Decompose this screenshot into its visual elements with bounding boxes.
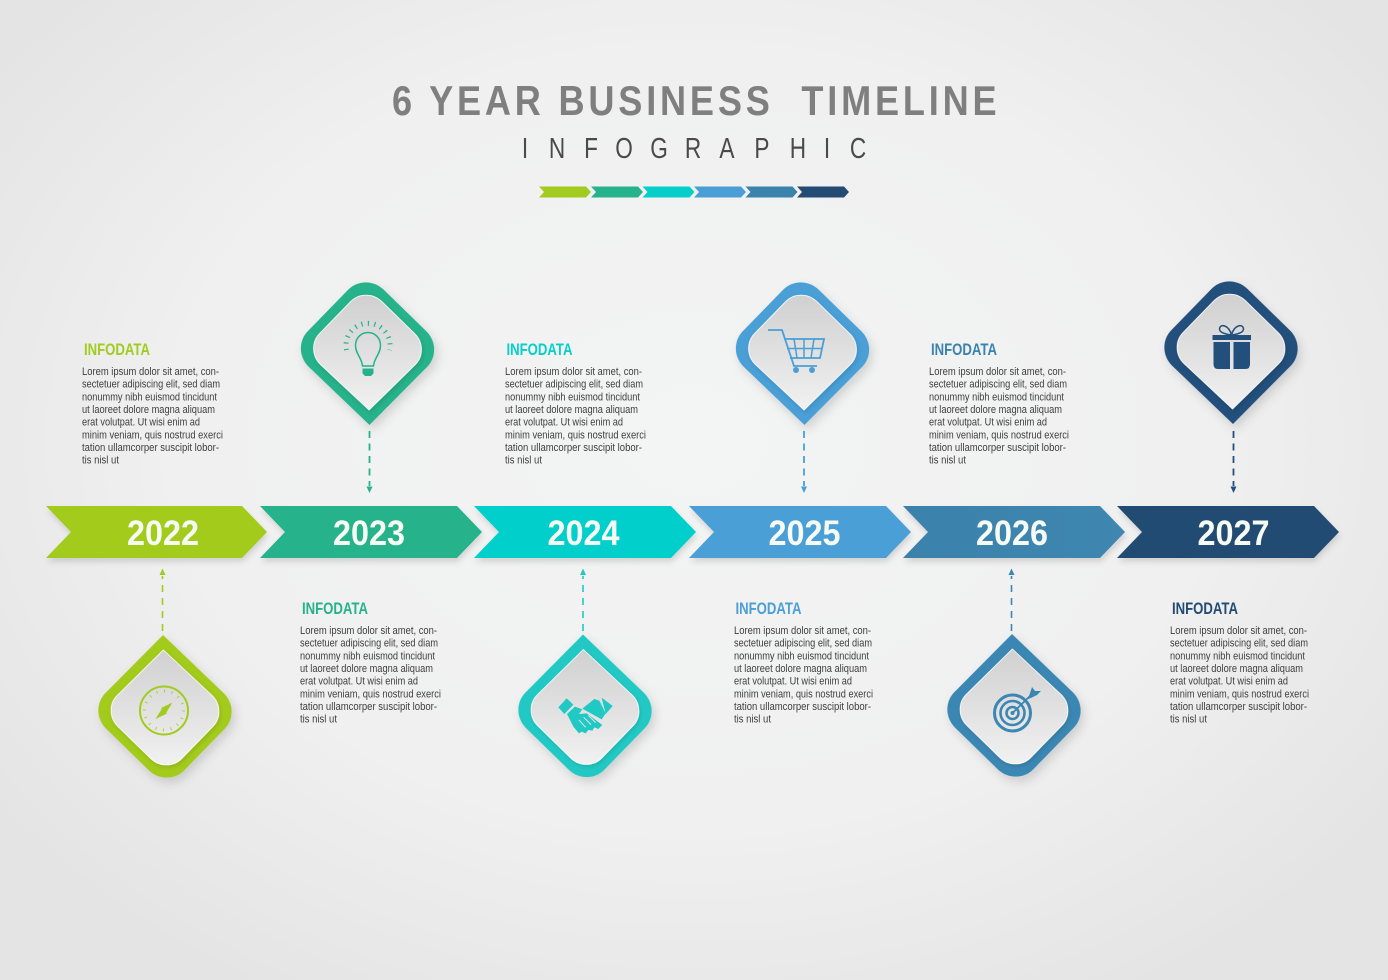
body 2026: sectetuer adipiscing elit, sed diam <box>929 379 1067 391</box>
milestone 2023 <box>299 282 436 493</box>
body 2026: tation ullamcorper suscipit lobor- <box>929 442 1066 454</box>
body 2025: nonummy nibh euismod tincidunt <box>734 650 869 662</box>
dashed arrow 2022 <box>160 568 166 631</box>
body 2023: nonummy nibh euismod tincidunt <box>300 650 435 662</box>
icon: handshake <box>558 698 613 733</box>
body 2027: sectetuer adipiscing elit, sed diam <box>1170 638 1308 650</box>
badge 2025 <box>734 282 871 425</box>
body 2027 <box>1170 625 1309 726</box>
heading 2026: INFODATA <box>931 340 997 359</box>
body 2026: tis nisl ut <box>929 455 966 467</box>
body 2025 <box>734 625 873 726</box>
badge 2023 <box>299 282 436 425</box>
badge 2024 <box>516 634 653 777</box>
body 2023: ut laoreet dolore magna aliquam <box>300 663 433 675</box>
body 2025: erat volutpat. Ut wisi enim ad <box>734 676 852 688</box>
heading 2025: INFODATA <box>736 599 802 618</box>
title: 6 YEAR BUSINESS TIMELINE <box>392 79 997 125</box>
text block 2027 <box>1170 599 1309 726</box>
icon: shopping cart <box>768 330 824 373</box>
body 2024: minim veniam, quis nostrud exerci <box>505 429 646 441</box>
timeline ribbon <box>46 506 1339 558</box>
icon: compass <box>140 686 188 734</box>
ribbon 2027: 2027 <box>1198 514 1270 553</box>
body 2027: erat volutpat. Ut wisi enim ad <box>1170 676 1288 688</box>
body 2027: tis nisl ut <box>1170 714 1207 726</box>
ribbon 2024: 2024 <box>548 514 620 553</box>
milestone 2022 <box>96 568 233 778</box>
body 2022: erat volutpat. Ut wisi enim ad <box>82 417 200 429</box>
body 2023: Lorem ipsum dolor sit amet, con- <box>300 625 437 637</box>
body 2024: sectetuer adipiscing elit, sed diam <box>505 379 643 391</box>
dashed arrow 2026 <box>1008 568 1014 631</box>
body 2025: sectetuer adipiscing elit, sed diam <box>734 638 872 650</box>
body 2025: ut laoreet dolore magna aliquam <box>734 663 867 675</box>
ribbon 2024 <box>474 506 696 558</box>
body 2022 <box>82 366 223 467</box>
body 2027: nonummy nibh euismod tincidunt <box>1170 650 1305 662</box>
body 2026: Lorem ipsum dolor sit amet, con- <box>929 366 1066 378</box>
ribbon 2026: 2026 <box>976 514 1048 553</box>
badge 2026 <box>945 634 1082 777</box>
body 2026: ut laoreet dolore magna aliquam <box>929 404 1062 416</box>
body 2022: tis nisl ut <box>82 455 119 467</box>
body 2024: nonummy nibh euismod tincidunt <box>505 391 640 403</box>
badge 2027 <box>1163 281 1300 424</box>
body 2026: erat volutpat. Ut wisi enim ad <box>929 417 1047 429</box>
body 2023: sectetuer adipiscing elit, sed diam <box>300 638 438 650</box>
ribbon 2027 <box>1117 506 1339 558</box>
body 2023: minim veniam, quis nostrud exerci <box>300 688 441 700</box>
body 2026: minim veniam, quis nostrud exerci <box>929 429 1069 441</box>
badge 2022 <box>96 635 233 778</box>
body 2022: Lorem ipsum dolor sit amet, con- <box>82 366 219 378</box>
body 2027: ut laoreet dolore magna aliquam <box>1170 663 1303 675</box>
text block 2026 <box>929 340 1069 467</box>
ribbon 2022: 2022 <box>127 514 199 553</box>
body 2022: minim veniam, quis nostrud exerci <box>82 429 223 441</box>
body 2024: tis nisl ut <box>505 455 542 467</box>
heading 2023: INFODATA <box>302 599 368 618</box>
body 2024: Lorem ipsum dolor sit amet, con- <box>505 366 642 378</box>
body 2025: tis nisl ut <box>734 714 771 726</box>
body 2025: tation ullamcorper suscipit lobor- <box>734 701 871 713</box>
body 2026: nonummy nibh euismod tincidunt <box>929 391 1064 403</box>
subtitle: INFOGRAPHIC <box>522 131 866 165</box>
icon: target <box>994 687 1041 731</box>
body 2027: tation ullamcorper suscipit lobor- <box>1170 701 1307 713</box>
body 2024: erat volutpat. Ut wisi enim ad <box>505 417 623 429</box>
ribbon 2026 <box>903 506 1125 558</box>
ribbon 2025 <box>689 506 911 558</box>
body 2024: tation ullamcorper suscipit lobor- <box>505 442 642 454</box>
text block 2024 <box>505 340 646 467</box>
milestone 2025 <box>734 282 871 493</box>
heading 2027: INFODATA <box>1172 599 1238 618</box>
body 2023 <box>300 625 441 726</box>
text block 2025 <box>734 599 873 726</box>
body 2022: ut laoreet dolore magna aliquam <box>82 404 215 416</box>
body 2026 <box>929 366 1069 467</box>
body 2027: Lorem ipsum dolor sit amet, con- <box>1170 625 1307 637</box>
body 2025: Lorem ipsum dolor sit amet, con- <box>734 625 871 637</box>
body 2023: tis nisl ut <box>300 714 337 726</box>
dashed arrow 2025 <box>801 431 807 493</box>
body 2027: minim veniam, quis nostrud exerci <box>1170 688 1309 700</box>
text block 2023 <box>300 599 441 726</box>
icon: gift box <box>1212 326 1251 369</box>
text block 2022 <box>82 340 223 467</box>
milestone 2024 <box>516 568 653 777</box>
body 2024 <box>505 366 646 467</box>
body 2023: tation ullamcorper suscipit lobor- <box>300 701 437 713</box>
title chevron strip <box>539 186 849 198</box>
dashed arrow 2024 <box>580 568 586 631</box>
milestone 2026 <box>945 568 1082 777</box>
ribbon 2023: 2023 <box>333 514 405 553</box>
body 2023: erat volutpat. Ut wisi enim ad <box>300 676 418 688</box>
milestone 2027 <box>1163 281 1300 493</box>
body 2022: nonummy nibh euismod tincidunt <box>82 391 217 403</box>
body 2022: sectetuer adipiscing elit, sed diam <box>82 379 220 391</box>
dashed arrow 2023 <box>366 431 372 493</box>
heading 2024: INFODATA <box>506 340 572 359</box>
dashed arrow 2027 <box>1230 431 1236 493</box>
ribbon 2025: 2025 <box>768 514 840 553</box>
body 2022: tation ullamcorper suscipit lobor- <box>82 442 219 454</box>
body 2024: ut laoreet dolore magna aliquam <box>505 404 638 416</box>
body 2025: minim veniam, quis nostrud exerci <box>734 688 873 700</box>
ribbon 2022 <box>46 506 267 558</box>
ribbon 2023 <box>260 506 482 558</box>
heading 2022: INFODATA <box>84 340 150 359</box>
icon: light bulb <box>346 323 390 376</box>
